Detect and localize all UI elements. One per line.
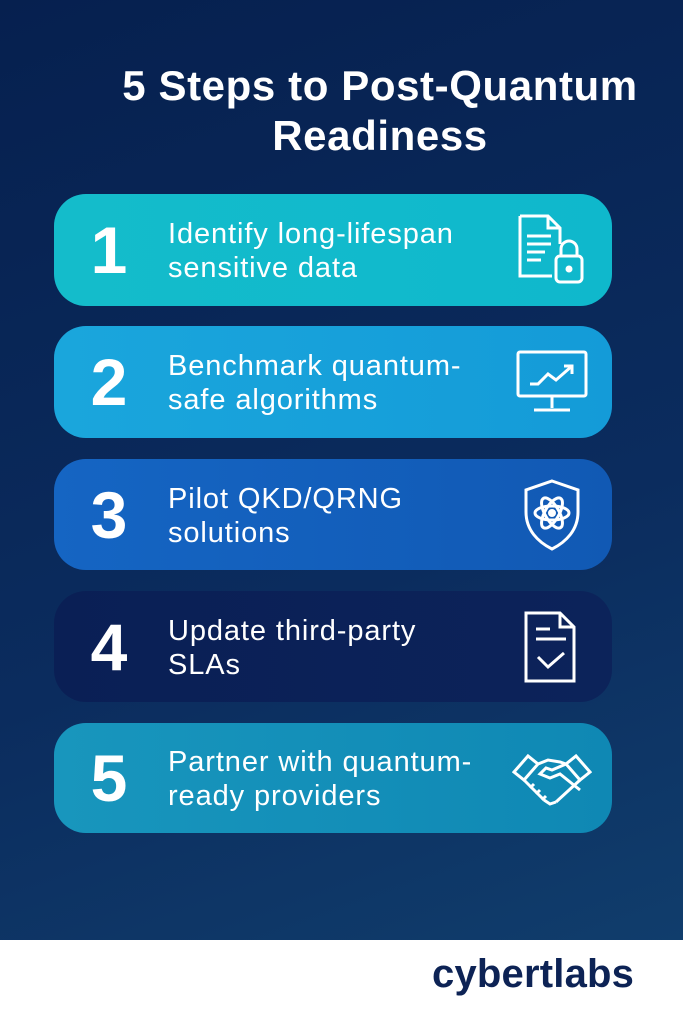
text 2: Benchmark quantum- (168, 350, 461, 382)
text 1 (168, 218, 454, 284)
number 2: 2 (91, 345, 127, 419)
icon: document check (524, 612, 576, 682)
number 5: 5 (91, 741, 127, 815)
text 3: solutions (168, 516, 291, 548)
footer logo: cybertlabs (432, 952, 634, 996)
text 4: Update third-party (168, 614, 416, 646)
text 3 (168, 482, 403, 548)
panel: step 4 (54, 591, 612, 702)
text 1: sensitive data (168, 252, 358, 284)
title: Readiness (272, 112, 488, 159)
text 2 (168, 350, 461, 416)
panel: step 3 (54, 459, 612, 570)
text 1: Identify long-lifespan (168, 218, 454, 250)
panel: step 5 (54, 723, 612, 833)
text 2: safe algorithms (168, 384, 378, 416)
title (122, 62, 638, 159)
text 3: Pilot QKD/QRNG (168, 482, 403, 514)
icon: handshake (512, 754, 592, 806)
number 4: 4 (91, 610, 127, 684)
text 5: ready providers (168, 780, 381, 812)
text 4: SLAs (168, 648, 241, 680)
title: 5 Steps to Post-Quantum (122, 62, 638, 109)
icon: atom shield (524, 479, 580, 551)
icon: document lock (518, 214, 584, 284)
text 4 (168, 614, 416, 680)
panel: step 1 (54, 194, 612, 306)
number 1: 1 (91, 213, 127, 287)
text 5 (168, 746, 472, 812)
number 3: 3 (91, 478, 127, 552)
icon: monitor chart (516, 350, 588, 412)
text 5: Partner with quantum- (168, 746, 472, 778)
panel: step 2 (54, 326, 612, 438)
